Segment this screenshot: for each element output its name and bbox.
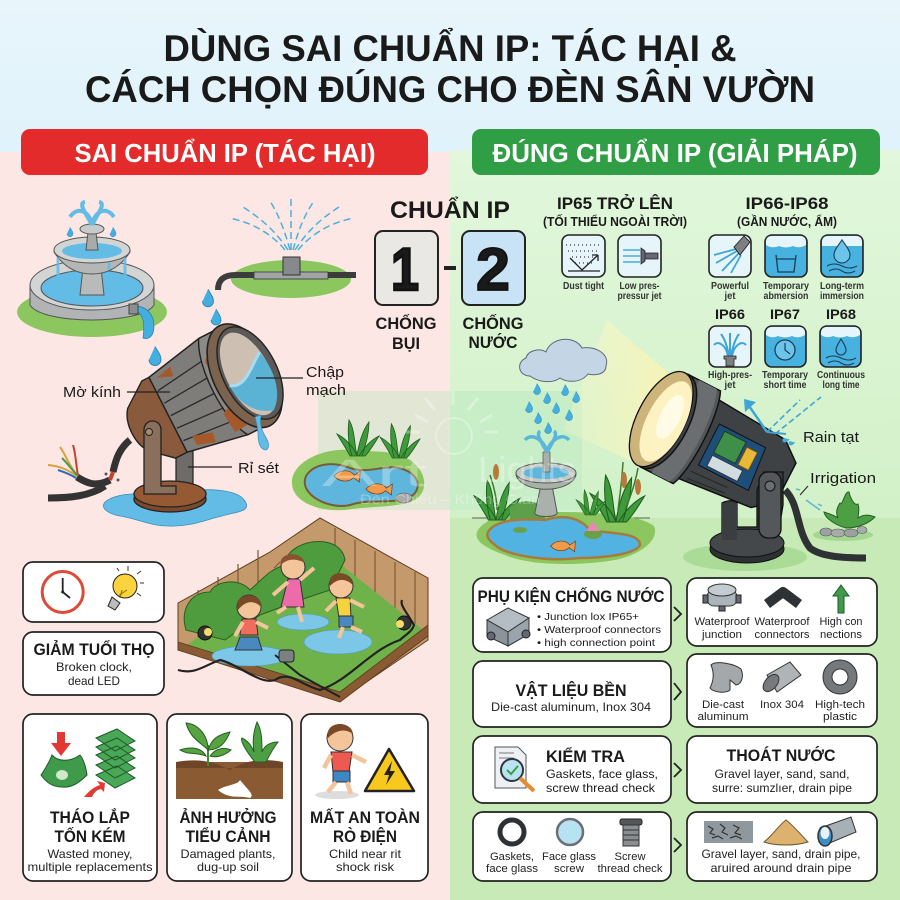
heading: thao lap [50, 808, 130, 846]
text: damaged plants: dug-up soil [197, 860, 259, 874]
text: child near: Child near rit [329, 847, 402, 861]
icon: clock [42, 572, 83, 612]
caption: temporary immersion [763, 281, 809, 302]
girl [273, 555, 314, 622]
panel: vat lieu ben [473, 661, 671, 727]
icon: screw [620, 819, 642, 846]
caption: continuous long time: Continuous [817, 370, 865, 381]
digit box 2: 2 [476, 236, 510, 303]
text: check list: Gaskets, face glass, [546, 767, 658, 781]
icon: continuous long time [820, 326, 861, 367]
illustration: children in wet garden [178, 518, 428, 702]
caption: continuous long time [817, 370, 865, 391]
icon: damaged plant and soil [176, 722, 283, 799]
caption: low pressure jet: Low pres- [620, 281, 660, 292]
heading: ip65: IP65 TRỞ LÊN [557, 194, 673, 213]
title: CÁCH CHỌN ĐÚNG CHO ĐÈN SÂN VƯỜN [85, 68, 815, 110]
caption: temporary short time: Temporary [762, 370, 808, 381]
text: check list: screw thread check [546, 781, 656, 795]
heading: anh huong [180, 808, 276, 846]
caption: high connections: nections [820, 629, 862, 641]
caption: inox 304: Inox 304 [760, 699, 804, 711]
caption: gaskets: Gaskets, [490, 851, 534, 863]
caption: face glass screw [542, 851, 596, 875]
label: bui: BỤI [392, 335, 420, 353]
caption: gaskets: face glass [486, 863, 539, 875]
stand rear [160, 450, 193, 495]
panel: mat an toan [301, 714, 428, 881]
icon: temporary immersion [765, 235, 807, 277]
icon: inspection document [495, 747, 534, 791]
watermark [322, 391, 576, 507]
icon: junction box [487, 608, 530, 646]
icon: money and arrows [41, 729, 135, 797]
caption: temporary immersion: abmersion [764, 291, 808, 302]
caption: long-term immersion: immersion [820, 291, 864, 302]
label: irrigation [796, 470, 876, 510]
illustration: garden fountain and pond [472, 431, 655, 564]
label: ip66: IP66 [715, 306, 745, 322]
caption: continuous long time: long time [822, 380, 860, 391]
caption: face glass screw: Face glass [542, 851, 596, 863]
illustration: pond with fish [292, 420, 424, 510]
caption: high-tech plastic: High-tech [815, 699, 865, 711]
caption: face glass screw: screw [554, 863, 584, 875]
text: accessory list: • Junction lox IP65+ [537, 611, 639, 623]
digit box 1 [375, 231, 438, 305]
icon: sand pile [764, 820, 808, 845]
stand front plate [144, 421, 176, 494]
panel: kiem tra [473, 736, 671, 803]
text: accessory list: • high connection point [537, 637, 655, 649]
caption: high connections [820, 616, 862, 641]
head [616, 362, 810, 529]
arrow [674, 683, 681, 700]
illustration: overflowing fountain [17, 202, 167, 366]
fence [178, 518, 428, 700]
caption: long-term immersion: Long-term [820, 281, 864, 292]
label: chap mach: Chập [306, 364, 344, 381]
frayed cable [48, 440, 130, 498]
label: nuoc: NƯỚC [468, 333, 518, 352]
icon: boy [315, 724, 366, 799]
icon: long-term immersion [821, 235, 863, 277]
text: gravel layer: Gravel layer, sand, drain pipe, [702, 847, 860, 861]
label: chong nuoc: CHỐNG [462, 313, 524, 333]
caption: long-term immersion [820, 281, 864, 302]
heading: chuan ip: CHUẨN IP [390, 196, 510, 224]
caption: powerful jet: jet [724, 291, 736, 302]
text: gravel layer: aruired around drain pipe [710, 861, 852, 875]
caption: gaskets [486, 851, 539, 875]
caption: high-pressure jet: High-pres- [708, 370, 752, 381]
caption: dust tight: Dust tight [563, 281, 605, 292]
caption: waterproof connectors [754, 616, 810, 641]
caption: temporary short time [762, 370, 808, 391]
puddle [103, 490, 247, 526]
caption: waterproof junction [694, 616, 750, 641]
label: ip68: IP68 [826, 306, 856, 322]
arrow [674, 607, 681, 621]
icon: waterproof connectors [767, 592, 799, 604]
text: child near: shock risk [336, 860, 395, 874]
puddles [212, 614, 372, 666]
panel: material icons [687, 654, 877, 727]
text: damaged plants [180, 847, 276, 874]
text: child near [329, 847, 402, 874]
text: broken clock: Broken clock, [56, 660, 132, 674]
arrow [674, 838, 681, 852]
icon: gasket [500, 820, 524, 844]
panel: clock and bulb [23, 562, 164, 622]
caption: die-cast aluminum: Die-cast [702, 699, 744, 711]
panel: chuan IP [375, 196, 525, 353]
icon: face glass [557, 819, 583, 845]
panel: IP65 [543, 194, 687, 302]
caption: high-pressure jet: jet [724, 380, 736, 391]
lawn [180, 560, 427, 692]
text: drainage: surre: sumzlıer, drain pipe [712, 781, 852, 795]
arrow [674, 763, 681, 777]
title [85, 27, 815, 110]
caption: high-tech plastic [815, 699, 865, 723]
label: chap mach [256, 364, 346, 399]
text: check list [546, 767, 658, 795]
icon: dead bulb [108, 566, 144, 610]
caption: waterproof junction: junction [701, 629, 742, 641]
light beam [563, 320, 668, 465]
text: gravel layer [702, 847, 860, 875]
hedge [184, 541, 345, 640]
heading: ip66-ip68: IP66-IP68 [746, 194, 828, 213]
caption: low pressure jet: pressur jet [618, 291, 662, 302]
label: chong bui: CHỐNG [376, 313, 436, 333]
heading: thoat nuoc: THOÁT NƯỚC [726, 746, 836, 765]
label: ri set [188, 460, 280, 477]
icon: rain splash arrows [744, 397, 821, 446]
caption: die-cast aluminum [698, 699, 748, 723]
label: mo kinh: Mờ kính [63, 384, 121, 401]
panel: IP66-IP68 [708, 194, 865, 391]
heading: thao lap: THÁO LẮP [50, 808, 130, 827]
heading: thao lap: TỐN KÉM [54, 826, 126, 846]
text: accessory list [537, 611, 661, 649]
caption: waterproof junction: Waterproof [694, 616, 750, 628]
icon: drain pipe [818, 817, 856, 846]
caption: powerful jet [711, 281, 749, 302]
caption: high connections: High con [820, 616, 862, 628]
icon: waterproof junction [703, 584, 741, 611]
panel: accessories icons [687, 578, 877, 646]
text: materials: Die-cast aluminum, Inox 304 [491, 700, 651, 714]
icon: rain cloud [520, 339, 607, 434]
illustration: leaking sprinkler [202, 198, 356, 325]
cable [785, 490, 866, 558]
heading: anh huong: ẢNH HƯỞNG [180, 808, 276, 827]
caption: high-tech plastic: plastic [823, 711, 858, 723]
icon: electric hazard [365, 749, 414, 791]
icon: temporary short time [765, 326, 806, 367]
heading: phu kien: PHỤ KIỆN CHỐNG NƯỚC [478, 586, 664, 606]
panel: giam tuoi tho [23, 632, 164, 695]
caption: screw thread check [598, 851, 663, 875]
child sitting [235, 595, 268, 650]
digit box 2 [462, 231, 525, 305]
illustration: shrub [813, 492, 875, 541]
icon: high connection arrow [833, 585, 849, 613]
text: wasted money: multiple replacements [28, 860, 152, 874]
caption: high-pressure jet [708, 370, 752, 391]
panel: drainage materials [687, 812, 877, 881]
lamps and cable [178, 600, 414, 697]
heading: kiem tra: KIỂM TRA [546, 747, 625, 766]
watermark: Đèn Chiếu – Không Gian [360, 491, 540, 507]
title: DÙNG SAI CHUẨN IP: TÁC HẠI & [164, 27, 736, 69]
text: wasted money [28, 847, 152, 874]
watermark: Art [322, 453, 428, 495]
text: wasted money: Wasted money, [48, 847, 132, 861]
subheading: gan nuoc: (GẦN NƯỚC, ẨM) [737, 214, 837, 229]
icon: inox tube [760, 662, 801, 695]
label: chap mach: mạch [306, 382, 346, 399]
heading: giam tuoi tho: GIẢM TUỔI THỌ [34, 640, 154, 659]
heading: sai chuan IP: SAI CHUẨN IP (TÁC HẠI) [74, 139, 376, 168]
caption: waterproof connectors: Waterproof [754, 616, 810, 628]
heading: dung chuan IP: ĐÚNG CHUẨN IP (GIẢI PHÁP) [492, 138, 858, 168]
label: ip67: IP67 [770, 306, 800, 322]
panel: anh huong tieu canh [167, 714, 292, 881]
icon: plastic ring [823, 660, 857, 694]
watermark: Lights [478, 449, 576, 490]
heading: vat lieu ben: VẬT LIỆU BỀN [516, 681, 626, 700]
caption: temporary immersion: Temporary [763, 281, 809, 292]
icon: dust tight [562, 235, 605, 277]
text: drainage: Gravel layer, sand, sand, [714, 767, 850, 781]
caption: screw thread check: Screw [614, 851, 646, 863]
label: ri set: Rỉ sét [238, 460, 280, 477]
text: broken clock [56, 660, 132, 688]
heading: anh huong: TIỂU CẢNH [186, 827, 270, 846]
heading: mat an toan: MẤT AN TOÀN [310, 808, 420, 827]
text: drainage [712, 767, 852, 795]
heading: mat an toan [310, 808, 420, 846]
panel: thao lap ton kem [23, 714, 157, 881]
icon: powerful jet [709, 235, 751, 277]
illustration: rusty lamp [48, 311, 299, 526]
caption: temporary short time: short time [764, 380, 807, 391]
caption: low pressure jet [618, 281, 662, 302]
ground shadow [683, 543, 807, 571]
icon: low pressure jet [618, 235, 661, 277]
label: rain tat: Rain tạt [803, 429, 860, 446]
lamp head [107, 311, 299, 483]
icon: high-pressure jet [709, 326, 751, 367]
heading: sai chuan IP [21, 129, 428, 175]
caption: waterproof connectors: connectors [754, 629, 810, 641]
icon: die-cast tee [710, 663, 742, 692]
label: irrigation: Irrigation [810, 470, 876, 487]
cutaway circuit [698, 424, 769, 490]
text: broken clock: dead LED [68, 674, 120, 688]
text: damaged plants: Damaged plants, [180, 847, 276, 861]
icon: gravel [704, 821, 753, 843]
label: mo kinh [63, 384, 170, 401]
subheading: ngoai troi: (TỐI THIỂU NGOÀI TRỜI) [543, 214, 687, 229]
caption: screw thread check: thread check [598, 863, 663, 875]
illustration: good lamp [616, 362, 866, 571]
dash [444, 266, 456, 270]
heading: dung chuan IP [472, 129, 880, 175]
text: accessory list: • Waterproof connectors [537, 624, 661, 636]
stand [710, 472, 784, 563]
panel: phu kien chong nuoc [473, 578, 671, 652]
panel: gasket icons [473, 812, 671, 881]
caption: die-cast aluminum: aluminum [698, 711, 748, 723]
caption: powerful jet: Powerful [711, 281, 749, 292]
heading: mat an toan: RÒ ĐIỆN [333, 827, 397, 846]
panel: thoat nuoc [687, 736, 877, 803]
boy yellow [326, 573, 364, 638]
digit box 1: 1 [391, 236, 419, 303]
